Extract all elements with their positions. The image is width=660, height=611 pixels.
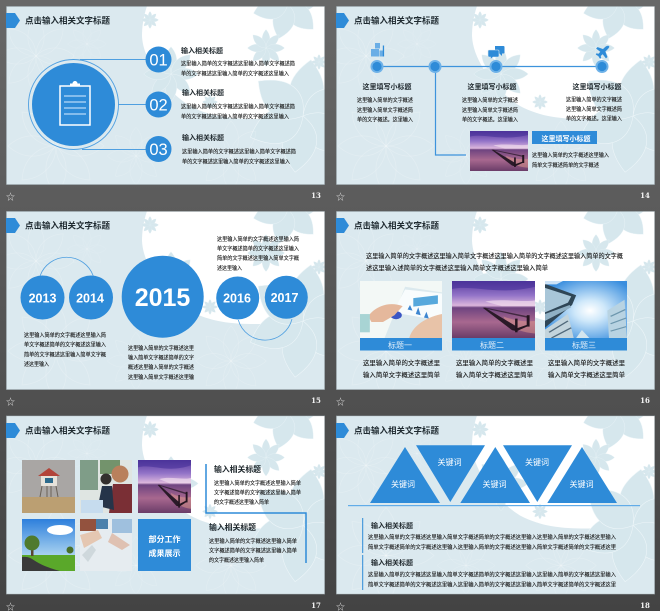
upper text block: 输入相关标题 <box>214 464 261 474</box>
lower text block: 的文字概述这里输入简单 <box>209 556 265 564</box>
item 02 badge <box>146 92 172 118</box>
text block 1: 输入相关标题 <box>371 521 413 530</box>
photo: pier <box>138 460 191 513</box>
triangle keyword 2: 关键词 <box>438 457 462 467</box>
caption 2 <box>456 358 533 379</box>
item 01 text: 单的文字概述这里输入简单的文字概述这里输入 <box>181 70 290 78</box>
label 2 <box>452 338 535 350</box>
lower text block: 文字概述简单的文字概述这里输入简单 <box>209 546 298 554</box>
item 02 text: 单的文字概述这里输入简单的文字概述这里输入 <box>181 112 290 120</box>
caption 1: 这里输入简单的文字概述里 <box>363 358 440 367</box>
text block 2: 输入相关标题 <box>371 558 413 567</box>
circle 2015 <box>122 256 204 338</box>
photo caption text <box>532 151 610 169</box>
slide 13 background <box>0 0 368 194</box>
slide 13 title: 点击输入相关文字标题 <box>25 14 110 26</box>
circle 2014: 2014 <box>76 292 104 306</box>
photo: pier at sunset <box>470 131 528 171</box>
lower text block: 这里输入简单的文字概述这里输入简单 <box>209 537 298 545</box>
page number: 17 <box>311 601 321 610</box>
intro text <box>366 251 624 272</box>
slide 17: photo grid <box>0 370 368 611</box>
left text <box>24 331 107 368</box>
timeline nodes <box>370 60 608 73</box>
slide 17 title: 点击输入相关文字标题 <box>25 424 110 436</box>
item 01 text: 输入相关标题 <box>181 46 223 55</box>
text block 2: 简单文字概述简单的文字概述这里输入这里输入简单的文字概述这里输入简单文字概述简单的文字概述这里 <box>368 580 617 588</box>
page number: 14 <box>640 191 650 200</box>
label 1: 标题一 <box>388 340 412 350</box>
column 3 text <box>566 82 623 122</box>
page number: 13 <box>311 191 321 200</box>
text block 2 <box>368 558 617 588</box>
blue caption box: 部分工作 <box>148 534 180 544</box>
slide 15 title: 点击输入相关文字标题 <box>25 220 110 230</box>
column 2 text: 这里输入简单的文字概述 <box>462 96 519 104</box>
blue subtitle label <box>532 131 597 144</box>
arc under 2016 and 2017 <box>238 319 292 340</box>
item 02 badge: 02 <box>149 96 168 114</box>
column 1 text: 这里填写小标题 <box>362 82 412 91</box>
text block 1: 简单文字概述简单的文字概述这里输入这里输入简单的文字概述这里输入简单文字概述简单的文字概述这里 <box>368 543 617 551</box>
photo: pier <box>452 281 535 338</box>
column 1 text: 这里输入简单的文字概述 <box>357 96 414 104</box>
right text: 述这里输入 <box>217 264 243 272</box>
left text: 简单的文字概述这里输入简单文字概 <box>24 350 107 358</box>
column 3 text: 这里输入简单的文字概述 <box>566 96 623 104</box>
text block 1: 这里输入简单的文字概述这里输入简单文字概述简单的文字概述这里输入这里输入简单的文字概述这里输入 <box>368 533 617 541</box>
caption 1: 输入简单文字概述这里简单 <box>363 370 440 379</box>
blue caption box <box>138 519 191 571</box>
left text: 这里输入简单的文字概述这里输入简 <box>24 331 106 339</box>
upper text block <box>214 464 302 506</box>
triangle keyword 4 <box>503 445 572 502</box>
right text: 单文字概述简单的文字概述这里输入 <box>217 244 300 252</box>
lower text block: 输入相关标题 <box>209 522 256 532</box>
item 03 text: 单的文字概述这里输入简单的文字概述这里输入 <box>182 158 291 166</box>
label 3: 标题三 <box>572 340 596 350</box>
slide 15 background <box>0 165 368 399</box>
photo: lifeguard tower <box>22 460 75 513</box>
slide 13: numbered list <box>0 0 368 202</box>
left text: 述这里输入 <box>24 360 50 368</box>
slide 14 title: 点击输入相关文字标题 <box>354 14 439 26</box>
centre text: 这里输入简单文字概述这里输 <box>128 373 195 381</box>
blue subtitle label: 这里填写小标题 <box>542 134 590 143</box>
column 2 text: 这里填写小标题 <box>468 82 516 91</box>
centre text: 输入简单文字概述简单的文字 <box>128 354 194 362</box>
circle 2014 <box>69 276 113 320</box>
slide 18 background <box>328 370 660 604</box>
upper text block: 这里输入简单的文字概述这里输入简单 <box>214 479 302 487</box>
baseline rule <box>348 505 640 506</box>
item 03 text <box>182 133 296 166</box>
icon: airplane <box>596 46 609 58</box>
icon: chat bubbles <box>488 46 504 60</box>
footer star: ☆ <box>336 192 345 202</box>
slide 16 title: 点击输入相关文字标题 <box>354 220 439 230</box>
slide 15: year circles <box>0 165 368 407</box>
page number: 15 <box>311 396 321 405</box>
item 03 text: 输入相关标题 <box>182 133 224 142</box>
text block 2: 这里输入简单的文字概述这里输入简单文字概述简单的文字概述这里输入这里输入简单的文字概述这里输入 <box>368 570 617 578</box>
column 3 text: 单的文字概述。这里输入 <box>566 114 623 122</box>
triangle keyword 2 <box>416 445 485 502</box>
photo caption text: 这里输入简单的文字概述这里输入 <box>532 151 610 159</box>
item 02 text: 输入相关标题 <box>182 88 224 97</box>
slide 18 title arrow <box>336 423 349 438</box>
item 03 badge: 03 <box>149 141 168 159</box>
footer star: ☆ <box>6 192 15 202</box>
page number: 16 <box>640 396 650 405</box>
column 2 text <box>462 82 519 124</box>
slide 16 title arrow <box>336 218 349 233</box>
caption 3: 输入简单文字概述这里简单 <box>548 370 625 379</box>
column 3 text: 这里填写小标题 <box>572 82 622 91</box>
item 02 text: 这里输入简单的文字概述这里输入简单文字概述简 <box>181 102 295 110</box>
blue caption box: 成果展示 <box>148 548 180 558</box>
slide 14: timeline <box>328 0 660 202</box>
label 3 <box>545 338 627 350</box>
circle 2017 <box>265 276 308 319</box>
photo: hands and papers <box>80 519 132 571</box>
accent bars <box>362 518 364 590</box>
circle 2015: 2015 <box>135 284 190 312</box>
photo: buildings <box>545 281 627 338</box>
upper text block: 的文字概述这里输入简单 <box>214 498 270 506</box>
item 01 text: 这里输入简单的文字概述这里输入简单文字概述简 <box>181 60 295 68</box>
arc over 2013 and 2014 <box>40 257 93 276</box>
icon: coins and chart <box>371 43 384 56</box>
right text <box>217 235 300 272</box>
photo: students <box>80 460 132 513</box>
caption 2: 这里输入简单的文字概述里 <box>456 358 533 367</box>
circle 2017: 2017 <box>271 291 298 305</box>
slide 15 title arrow <box>6 218 20 233</box>
triangle keyword 5 <box>547 447 617 503</box>
triangle keyword 1: 关键词 <box>391 479 415 489</box>
triangle keyword 5: 关键词 <box>570 479 594 489</box>
slide 16: three photos <box>328 165 660 407</box>
label 1 <box>360 338 442 350</box>
slide 14 background <box>328 0 660 194</box>
right text: 这里输入简单的文字概述这里输入简 <box>217 235 299 243</box>
triangle keyword 1 <box>370 447 440 503</box>
slide 18: triangles <box>328 370 660 611</box>
timeline and branch connector <box>377 66 602 155</box>
text block 1 <box>368 521 617 551</box>
caption 2: 输入简单文字概述这里简单 <box>456 370 533 379</box>
triangle keyword 3 <box>460 447 530 503</box>
photo: tree and road <box>22 519 75 571</box>
intro text: 述这里输入述简单的文字概述这里输入简单文字概述这里输入简单 <box>366 263 548 272</box>
column 3 text: 这里输入简单文字概述简 <box>566 105 622 113</box>
circle 2016 <box>216 276 259 320</box>
lower text block <box>209 522 298 564</box>
column 1 text: 单的文字概述。这里输入 <box>357 116 414 124</box>
slide 17 title arrow <box>6 423 20 438</box>
slide 13 title arrow <box>6 13 20 28</box>
photo: tablet chart <box>360 281 442 338</box>
item 01 text <box>181 46 295 78</box>
upper text block: 文字概述简单的文字概述这里输入简单 <box>214 488 302 496</box>
slide 16 background <box>328 165 660 399</box>
circle 2013: 2013 <box>29 292 56 306</box>
right text: 简单的文字概述这里输入简单文字概 <box>217 254 300 262</box>
slide 14 title arrow <box>336 13 349 28</box>
central clipboard circle <box>28 60 118 150</box>
Z-shaped divider <box>206 464 306 563</box>
triangle keyword 3: 关键词 <box>482 479 506 489</box>
item 01 badge <box>146 46 172 72</box>
footer star: ☆ <box>6 397 15 407</box>
centre text: 概述这里输入简单的文字概述 <box>128 363 195 371</box>
slide 17 background <box>0 370 368 604</box>
column 2 text: 单的文字概述。这里输入 <box>462 116 519 124</box>
label 2: 标题二 <box>480 340 504 350</box>
page number: 18 <box>640 601 650 610</box>
caption 3: 这里输入简单的文字概述里 <box>548 358 625 367</box>
connector lines <box>80 60 147 150</box>
item 01 badge: 01 <box>149 52 168 70</box>
column 1 text: 这里输入简单文字概述简 <box>357 106 413 114</box>
item 03 text: 这里输入简单的文字概述这里输入简单文字概述简 <box>182 148 296 156</box>
footer star: ☆ <box>336 397 345 407</box>
column 1 text <box>357 82 414 124</box>
intro text: 这里输入简单的文字概述这里输入简单文字概述这里输入简单的文字概述这里输入简单的文字概 <box>366 251 624 260</box>
circle 2016: 2016 <box>223 292 251 306</box>
caption 1 <box>363 358 440 379</box>
photo caption text: 简单文字概述简单的文字概述 <box>532 161 600 169</box>
centre text <box>128 344 195 381</box>
circle 2013 <box>20 276 64 320</box>
item 03 badge <box>146 136 172 162</box>
centre text: 这里输入简单的文字概述这里 <box>128 344 195 352</box>
triangle keyword 4: 关键词 <box>525 457 549 467</box>
item 02 text <box>181 88 295 120</box>
left text: 单文字概述简单的文字概述这里输入 <box>24 340 107 348</box>
slide 18 title: 点击输入相关文字标题 <box>354 424 439 436</box>
caption 3 <box>548 358 625 379</box>
column 2 text: 这里输入简单文字概述简 <box>462 106 518 114</box>
